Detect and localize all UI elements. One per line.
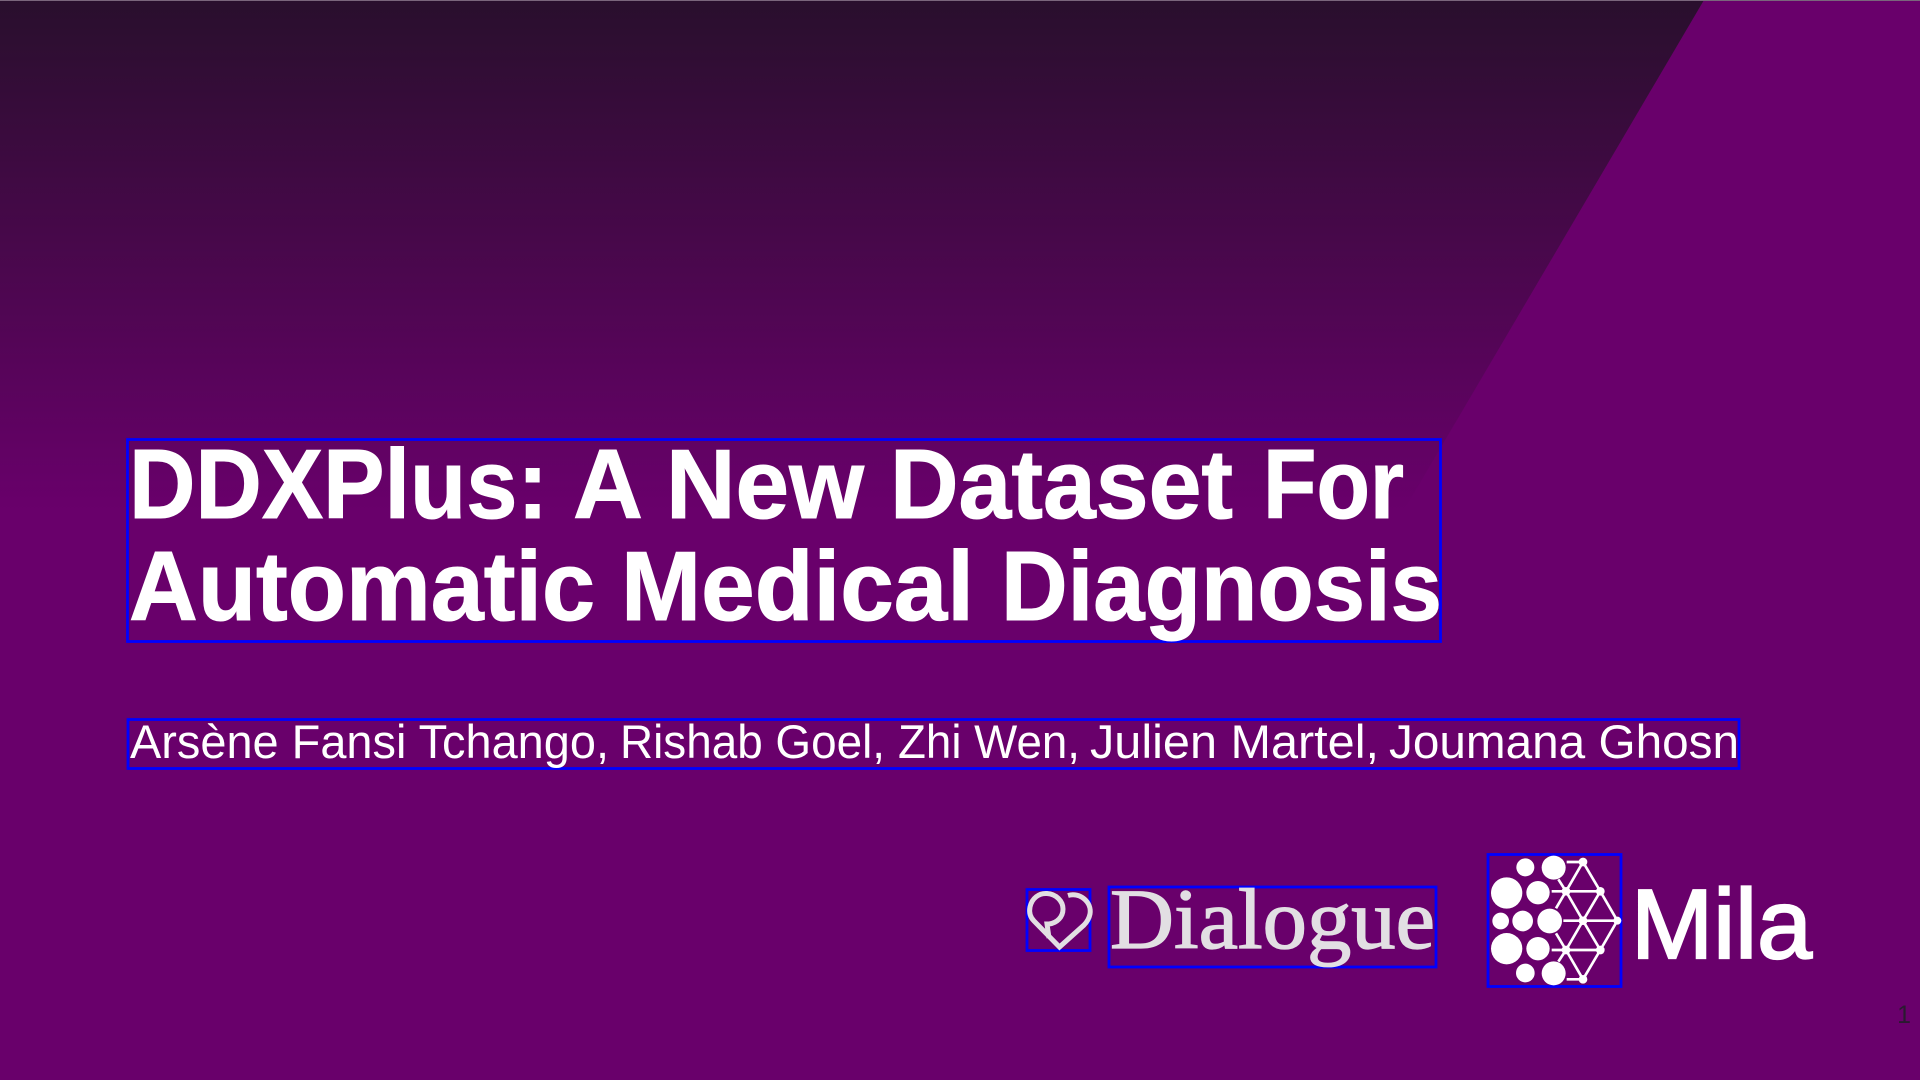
authors: Rishab Goel,	[620, 715, 885, 768]
page number: 1	[1897, 1001, 1911, 1029]
title: For	[1263, 429, 1404, 539]
dark gradient diagonal shape	[0, 0, 1704, 510]
title	[128, 429, 1442, 642]
title: Medical	[621, 531, 974, 641]
title: Automatic	[129, 531, 595, 641]
logo: Mila wordmark: Mila	[1631, 869, 1812, 979]
authors: Julien Martel,	[1090, 715, 1379, 768]
title: A	[573, 429, 643, 539]
title: Diagnosis	[1001, 531, 1442, 641]
authors: Arsène Fansi Tchango,	[130, 715, 609, 768]
logo: Dialogue wordmark: Dialogue	[1110, 871, 1435, 967]
title: New	[666, 429, 865, 539]
icon: dialogue heart	[1027, 890, 1090, 950]
title: DDXPlus:	[129, 429, 548, 539]
authors	[128, 715, 1739, 768]
title: Dataset	[890, 429, 1233, 539]
top edge line	[0, 0, 1920, 1]
authors: Joumana Ghosn	[1389, 715, 1739, 768]
logo: Mila network icon	[1488, 854, 1621, 986]
authors: Zhi Wen,	[898, 715, 1080, 768]
